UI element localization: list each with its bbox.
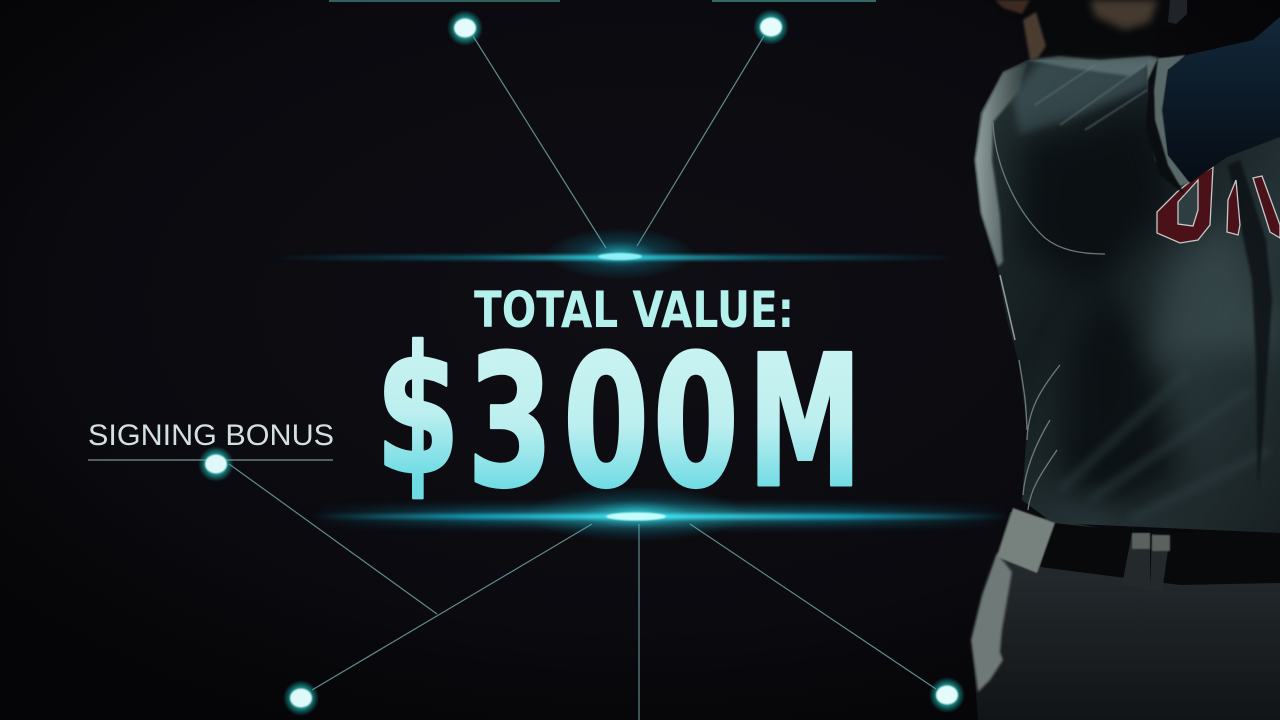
node: bottom right [929,677,965,713]
node: top right [753,9,789,45]
dark cuff edge [1146,58,1185,195]
node: top left [447,10,483,46]
heading: total value: TOTAL VALUE: [474,281,794,339]
sleeve cuff [1147,55,1190,186]
label: signing bonus: SIGNING BONUS [88,419,334,452]
navy arm [1163,17,1280,183]
jersey shoulder folds [1035,65,1155,130]
belt [1040,523,1280,585]
jersey shoulder lit area [1012,60,1150,135]
big number: $300M: $ [376,309,460,514]
sleeve seam [993,122,1105,254]
jersey torso [974,56,1280,533]
jersey shadow across chest [1020,110,1180,510]
lower glow beam [310,486,1010,542]
jersey rim light [975,62,1027,267]
side wrinkle lines [1000,275,1060,510]
connector lines [229,36,936,720]
belt loops [1122,533,1170,592]
big number: $300M: M [748,316,862,528]
jersey lower folds [1060,370,1270,520]
big number: $300M [376,309,862,528]
jersey lettering [1157,167,1280,243]
node: bottom left [283,680,319,716]
node: signing bonus [198,446,234,482]
waistband light patch [997,508,1055,573]
pants [972,512,1280,720]
placket dark stripe [1228,160,1272,490]
upper glow beam [270,228,960,280]
head and neck [990,0,1188,60]
pants side highlight [971,553,1012,692]
baseball player figure [971,0,1280,720]
big number: $300M: 300 [467,317,739,528]
right jersey lit panel [1150,220,1280,370]
label rules at top [329,0,876,2]
shoulder top highlight [1027,56,1158,76]
